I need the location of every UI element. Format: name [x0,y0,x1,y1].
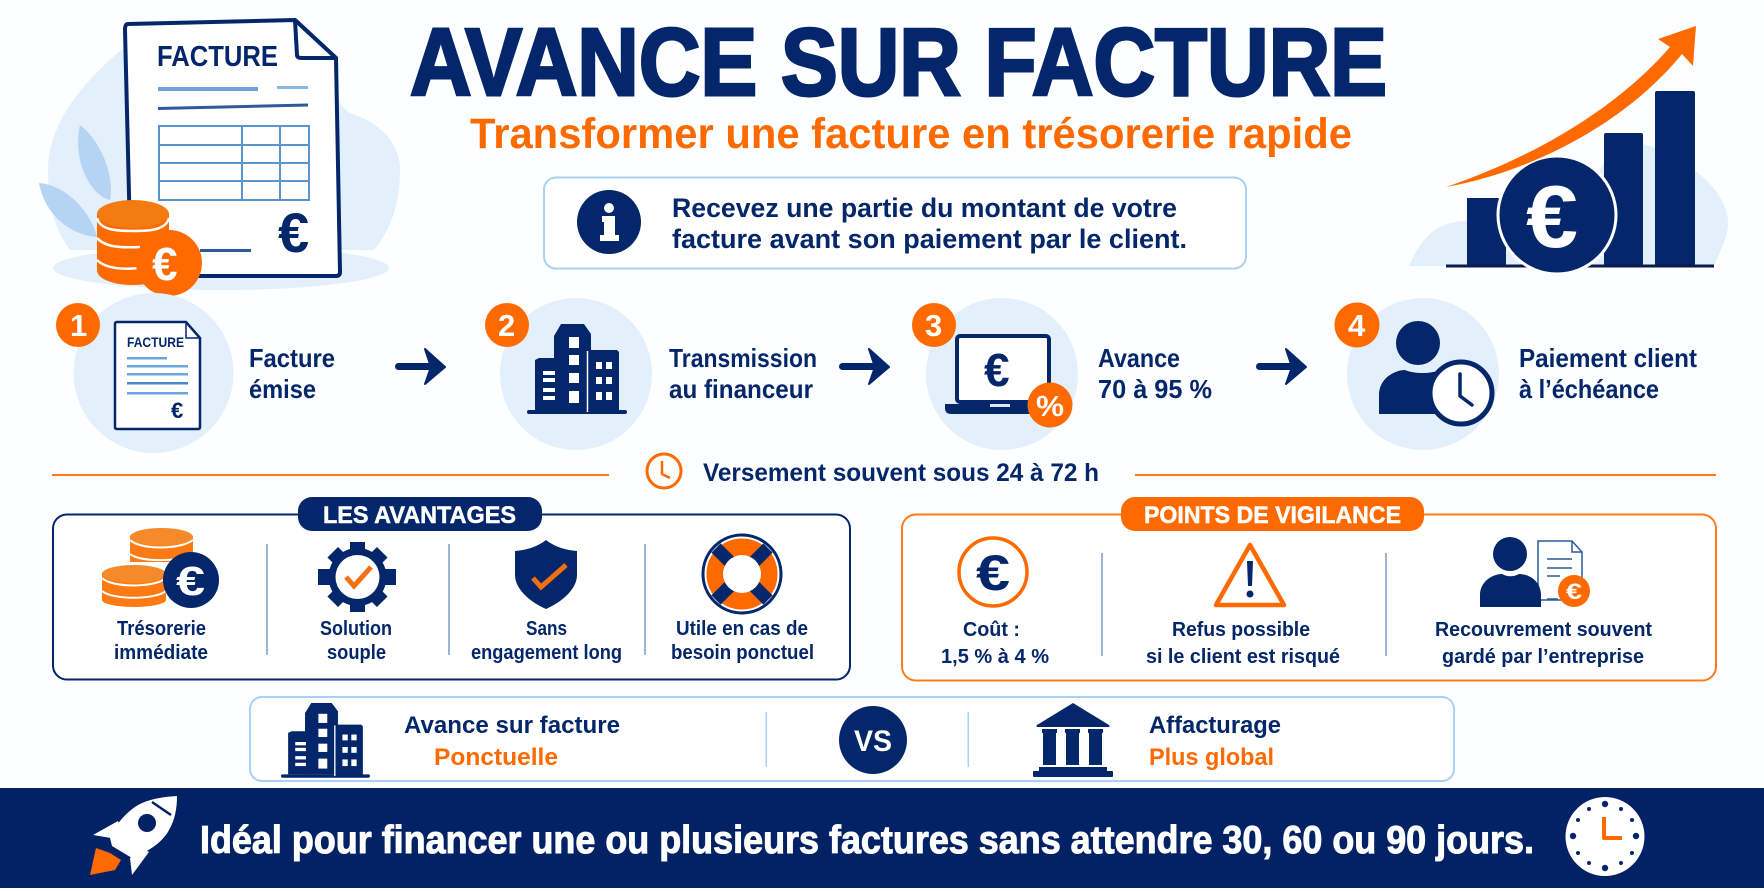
item: refus possible: si le client est risqué [1146,646,1340,668]
timing note: Versement souvent sous 24 à 72 h [703,459,1099,487]
item: trésorerie [102,528,219,664]
arrow 1 [395,349,445,384]
step 4: paiement client: Paiement client [1519,343,1697,373]
step 3: avance [912,298,1212,450]
heading: POINTS DE VIGILANCE [1144,502,1401,529]
item: recouvrement: gardé par l’entreprise [1442,646,1644,668]
icon: invoice: € [171,398,183,423]
item: solution souple [318,542,396,664]
step 3: avance: 70 à 95 % [1098,374,1212,404]
step 2: transmission [485,298,817,450]
icon: person, document, coin: € [1566,579,1582,604]
item: utile besoin ponctuel: Utile en cas de [676,618,808,640]
step 4: paiement client: à l’échéance [1519,374,1659,404]
comparison strip: Ponctuelle [434,744,558,771]
item: coût: € [976,545,1010,601]
icon: gear with check [318,542,396,612]
arrow 2 [839,349,889,384]
item: utile besoin ponctuel [671,535,814,664]
icon: person with clock [1379,321,1492,424]
step 2: transmission: Transmission [669,343,817,373]
item: trésorerie: € [176,558,205,604]
panel: les avantages [53,497,850,680]
illustration: growth chart with euro coin [1409,26,1728,274]
icon: shield with check [515,540,577,609]
comparison strip: Plus global [1149,744,1274,771]
badge 4 [1334,302,1380,348]
footer banner [0,788,1764,888]
icon: warning triangle [1216,545,1284,605]
arrow 3 [1256,349,1306,384]
item: sans engagement [471,540,622,664]
badge 4: 4 [1348,308,1366,343]
item: recouvrement [1435,537,1652,668]
item: solution souple: souple [327,642,386,664]
icon: invoice [115,322,200,429]
item: refus possible: Refus possible [1172,619,1310,641]
callout: definition [544,178,1246,268]
item: sans engagement: engagement long [471,642,622,664]
step 1: facture émise [56,293,335,453]
icon: building small [281,703,370,778]
item: coût: 1,5 % à 4 % [941,646,1049,668]
badge: percent [1028,382,1072,428]
item: solution souple: Solution [320,618,392,640]
item: recouvrement: Recouvrement souvent [1435,619,1652,641]
item: sans engagement: Sans [526,618,567,640]
badge 2 [485,303,529,347]
step 4: paiement client [1334,298,1697,450]
item: trésorerie: Trésorerie [117,618,206,640]
icon: lifebuoy [703,535,781,613]
callout: definition: Recevez une partie du montant de votre [672,193,1177,223]
step 1: facture émise: émise [249,374,316,404]
comparison strip: Avance sur facture [404,712,620,739]
badge 3 [912,303,956,347]
illustration: invoice with coins: € [152,238,178,290]
heading [1121,497,1424,531]
item: utile besoin ponctuel: besoin ponctuel [671,642,814,664]
icon: laptop: € [984,344,1010,396]
title: AVANCE SUR FACTURE [410,9,1387,116]
item: refus possible [1146,545,1340,668]
icon: person, document, coin [1480,537,1590,607]
heading: LES AVANTAGES [323,502,516,529]
icon: white clock [1566,797,1644,876]
badge: VS [839,706,907,774]
item: coût [941,538,1049,668]
comparison strip: Affacturage [1149,712,1281,739]
badge: percent: % [1036,391,1064,423]
icon: laptop [945,336,1052,414]
badge 1: 1 [70,308,87,343]
step 3: avance: Avance [1098,343,1180,373]
icon: orange clock [647,454,681,488]
badge: VS: VS [854,725,892,758]
illustration: invoice with coins: € [278,201,309,264]
illustration: invoice with coins [39,20,400,296]
badge 3: 3 [925,308,942,343]
icon: bank [1033,703,1113,777]
icon: invoice: FACTURE [127,334,184,350]
comparison strip [250,697,1454,781]
item: trésorerie: immédiate [114,642,208,664]
heading [298,497,542,531]
step 2: transmission: au financeur [669,374,813,404]
icon: rocket [90,796,177,875]
illustration: invoice with coins: FACTURE [157,41,278,73]
panel: points de vigilance [902,497,1716,680]
badge 1 [56,303,100,347]
item: coût: Coût : [963,619,1020,641]
icon: info [577,190,641,254]
step 1: facture émise: Facture [249,343,335,373]
callout: definition: facture avant son paiement par le client. [672,224,1187,254]
subtitle: Transformer une facture en trésorerie rapide [470,110,1352,158]
illustration: growth chart with euro coin: € [1526,167,1578,266]
icon: building [527,324,627,414]
badge 2: 2 [498,308,515,343]
footer banner: Idéal pour financer une ou plusieurs factures sans attendre 30, 60 ou 90 jours. [200,819,1534,862]
